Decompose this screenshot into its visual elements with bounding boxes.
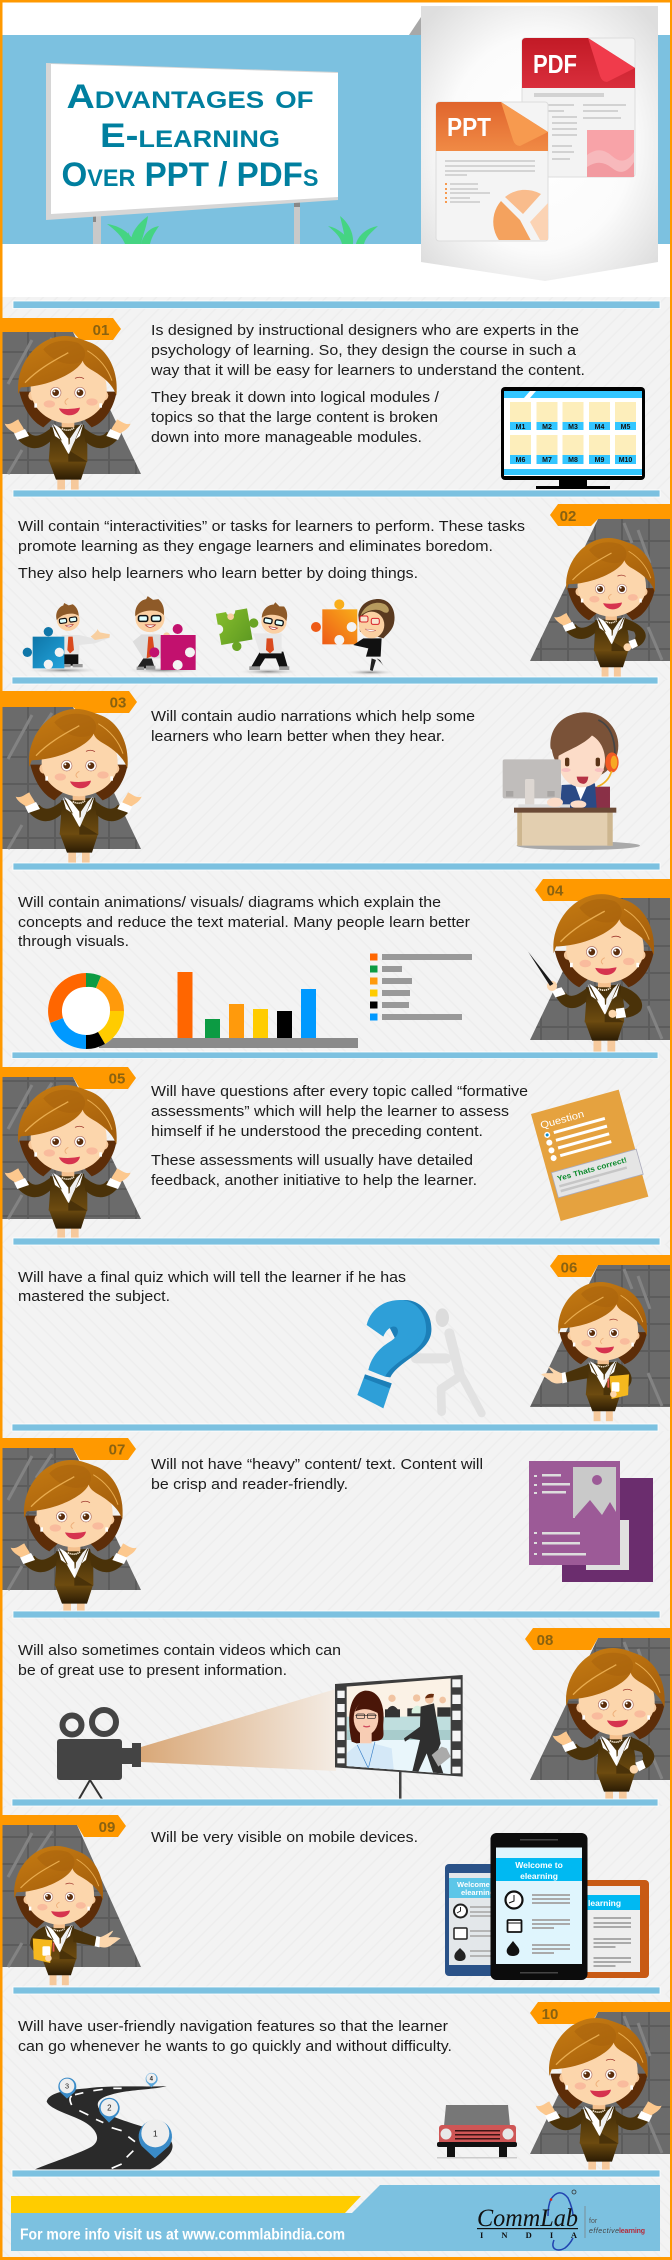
text — [151, 1083, 528, 1189]
number badge 04: 04 — [547, 882, 564, 900]
tablet: learning — [588, 1898, 621, 1908]
illustration: mobile devices — [445, 1833, 649, 1980]
character — [528, 894, 654, 1052]
icon: question paper — [531, 1089, 649, 1221]
title: Over PPT / PDFs — [62, 156, 318, 194]
footer — [11, 2185, 660, 2251]
main phone: elearning — [520, 1871, 558, 1881]
icon: monitor with modules: M7 — [542, 457, 552, 464]
text — [151, 1456, 483, 1493]
illustration: winding road with pins — [35, 2073, 173, 2169]
illustration: people with puzzle pieces — [23, 596, 397, 675]
backdrop — [530, 898, 670, 1040]
icon: monitor with modules: M1 — [516, 424, 525, 431]
number badge 02 — [550, 504, 670, 526]
divider bar — [13, 1987, 660, 1994]
icon: question paper: Yes Thats correct! — [556, 1155, 628, 1183]
logo: CommLab India: for — [589, 2218, 598, 2225]
text: Will be very visible on mobile devices. — [151, 1829, 418, 1846]
character — [5, 336, 131, 491]
text: Will have user-friendly navigation features so that the learner — [18, 2018, 448, 2035]
text: through visuals. — [18, 933, 129, 950]
divider bar — [13, 863, 660, 870]
text: concepts and reduce the text material. Many people learn better — [18, 914, 470, 931]
character — [554, 538, 655, 677]
title: Advantages of — [66, 78, 314, 116]
pin 1: 1 — [153, 2129, 158, 2139]
panel: advantage 06 — [18, 1255, 670, 1421]
icon: monitor with modules: M4 — [595, 424, 604, 431]
character — [16, 709, 142, 864]
panel: advantage 05 — [2, 1067, 649, 1240]
text — [18, 1642, 341, 1679]
character — [11, 1460, 137, 1615]
plants — [107, 216, 378, 244]
text: mastered the subject. — [18, 1288, 170, 1305]
icon: monitor with modules: M9 — [595, 457, 604, 464]
backdrop — [2, 707, 141, 849]
divider bar — [13, 1238, 660, 1245]
icon: question paper: Question — [539, 1109, 585, 1132]
text — [18, 1269, 406, 1305]
panel: advantage 04 — [18, 879, 670, 1052]
billboard — [46, 63, 338, 220]
logo: CommLab India — [477, 2190, 645, 2250]
main phone: Welcome to — [515, 1860, 563, 1870]
pin 2: 2 — [107, 2104, 112, 2113]
divider bar — [13, 490, 660, 497]
text: Will have a final quiz which will tell the learner if he has — [18, 1269, 406, 1286]
backdrop — [530, 1638, 670, 1780]
text: himself if he understood the preceding content. — [151, 1123, 483, 1140]
text: Will also sometimes contain videos which can — [18, 1642, 341, 1659]
icon: purple documents — [529, 1461, 653, 1582]
divider bar — [13, 301, 660, 308]
icon: monitor with modules: M5 — [621, 424, 630, 431]
title — [62, 78, 318, 194]
donut chart — [48, 973, 124, 1049]
logo: CommLab India: effective — [589, 2228, 619, 2235]
header banner — [2, 6, 670, 281]
divider bar — [12, 677, 658, 684]
character — [536, 2018, 662, 2173]
number badge 01: 01 — [93, 322, 109, 339]
icon: PPT document — [436, 102, 548, 251]
text: way that it will be easy for learners to understand the content. — [150, 362, 585, 379]
character — [5, 1085, 131, 1240]
character — [14, 1846, 121, 1985]
text: Will have questions after every topic called “formative — [151, 1083, 528, 1100]
text — [18, 2018, 452, 2055]
number badge 07: 07 — [109, 1442, 125, 1458]
divider bar — [12, 1424, 658, 1431]
pin 4: 4 — [150, 2077, 154, 2083]
panel: advantage 02 — [18, 504, 670, 677]
icon: film camera — [57, 1709, 141, 1799]
divider bar — [12, 1799, 658, 1806]
footer call to action: For more info visit us at www.commlabindia.com — [20, 2226, 345, 2244]
text: Is designed by instructional designers who are experts in the — [151, 322, 579, 339]
text: These assessments will usually have detailed — [151, 1152, 473, 1169]
text — [18, 894, 470, 950]
left phone — [445, 1864, 500, 1976]
backdrop — [530, 2012, 670, 2154]
panel: advantage 01 — [2, 318, 645, 491]
projected film screen — [335, 1675, 463, 1799]
left phone: Welcome — [457, 1880, 490, 1889]
number badge 08: 08 — [537, 1632, 553, 1649]
icon: monitor with modules: M3 — [568, 424, 578, 431]
title: E-learning — [100, 117, 280, 155]
icon: car — [437, 2105, 517, 2158]
bar chart — [178, 972, 316, 1038]
logo: CommLab India: learning — [619, 2228, 645, 2235]
text — [18, 518, 525, 582]
backdrop — [2, 1825, 141, 1967]
backdrop — [530, 519, 670, 661]
main phone — [490, 1833, 588, 1980]
panel: advantage 10 — [18, 2002, 670, 2173]
number badge 04 — [535, 879, 670, 901]
billboard posts — [93, 200, 300, 244]
panel: advantage 07 — [2, 1438, 653, 1615]
icon: PDF document: PDF — [533, 49, 577, 79]
text: assessments” which will help the learner to assess — [151, 1103, 509, 1120]
text: down into more manageable modules. — [151, 429, 422, 446]
left phone: elearning — [461, 1888, 495, 1897]
text: learners who learn better when they hear. — [151, 728, 445, 745]
divider bar — [12, 1052, 658, 1058]
tablet — [570, 1880, 649, 1978]
text: Will contain animations/ visuals/ diagrams which explain the — [18, 894, 441, 911]
text: be crisp and reader-friendly. — [151, 1476, 348, 1493]
icon: monitor with modules: M6 — [516, 457, 525, 464]
number badge 07 — [2, 1438, 136, 1460]
character — [541, 1282, 647, 1421]
logo: CommLab India: CommLab — [477, 2205, 578, 2232]
backdrop — [2, 332, 141, 474]
number badge 03: 03 — [110, 694, 126, 712]
text: Will contain “interactivities” or tasks for learners to perform. These tasks — [18, 518, 525, 535]
number badge 06: 06 — [561, 1260, 577, 1276]
icon: PPT document: PPT — [447, 112, 491, 142]
number badge 01 — [2, 318, 121, 340]
backdrop — [2, 1448, 141, 1590]
text — [151, 708, 475, 745]
illustration: person pushing question mark — [357, 1300, 482, 1413]
backdrop — [530, 1265, 670, 1407]
text: psychology of learning. So, they design the course in such a — [151, 342, 577, 359]
text: topics so that the large content is broken — [151, 409, 438, 426]
icon: monitor with modules — [501, 387, 645, 489]
projector beam — [141, 1689, 336, 1771]
text — [150, 322, 585, 446]
text: Will not have “heavy” content/ text. Content will — [151, 1456, 483, 1473]
backdrop — [2, 1077, 141, 1219]
number badge 09 — [2, 1815, 126, 1837]
number badge 03 — [2, 691, 137, 713]
icon: monitor with modules: M10 — [619, 457, 632, 464]
logo: CommLab India: I N D I A — [480, 2230, 578, 2240]
legend — [370, 954, 472, 1020]
illustration: narrator at desk — [503, 712, 640, 850]
text: be of great use to present information. — [18, 1662, 287, 1679]
divider bar — [12, 2170, 660, 2177]
text: feedback, another initiative to help the learner. — [151, 1172, 477, 1189]
number badge 08 — [525, 1628, 670, 1650]
text: Will contain audio narrations which help some — [151, 708, 475, 725]
icon: monitor with modules: M8 — [568, 457, 578, 464]
panel: advantage 09 — [2, 1815, 649, 1985]
divider bar — [13, 1611, 660, 1618]
number badge 10 — [530, 2002, 670, 2024]
text: can go whenever he wants to go quickly and without difficulty. — [18, 2038, 452, 2055]
text: promote learning as they engage learners and eliminates boredom. — [18, 538, 493, 555]
number badge 09: 09 — [99, 1819, 115, 1836]
chart base — [99, 1038, 358, 1048]
ribbon with document icons — [409, 6, 658, 281]
number badge 05: 05 — [109, 1070, 125, 1088]
panel: advantage 03 — [2, 691, 640, 864]
icon: PDF document — [522, 38, 635, 177]
panel: advantage 08 — [18, 1628, 670, 1803]
icon: monitor with modules: M2 — [542, 424, 552, 431]
character — [553, 1648, 665, 1803]
number badge 10: 10 — [542, 2006, 558, 2023]
text: They also help learners who learn better by doing things. — [18, 565, 418, 582]
number badge 06 — [550, 1255, 670, 1277]
pin 3: 3 — [65, 2082, 69, 2091]
text: They break it down into logical modules / — [151, 389, 440, 406]
number badge 02: 02 — [560, 508, 576, 525]
number badge 05 — [2, 1067, 136, 1089]
